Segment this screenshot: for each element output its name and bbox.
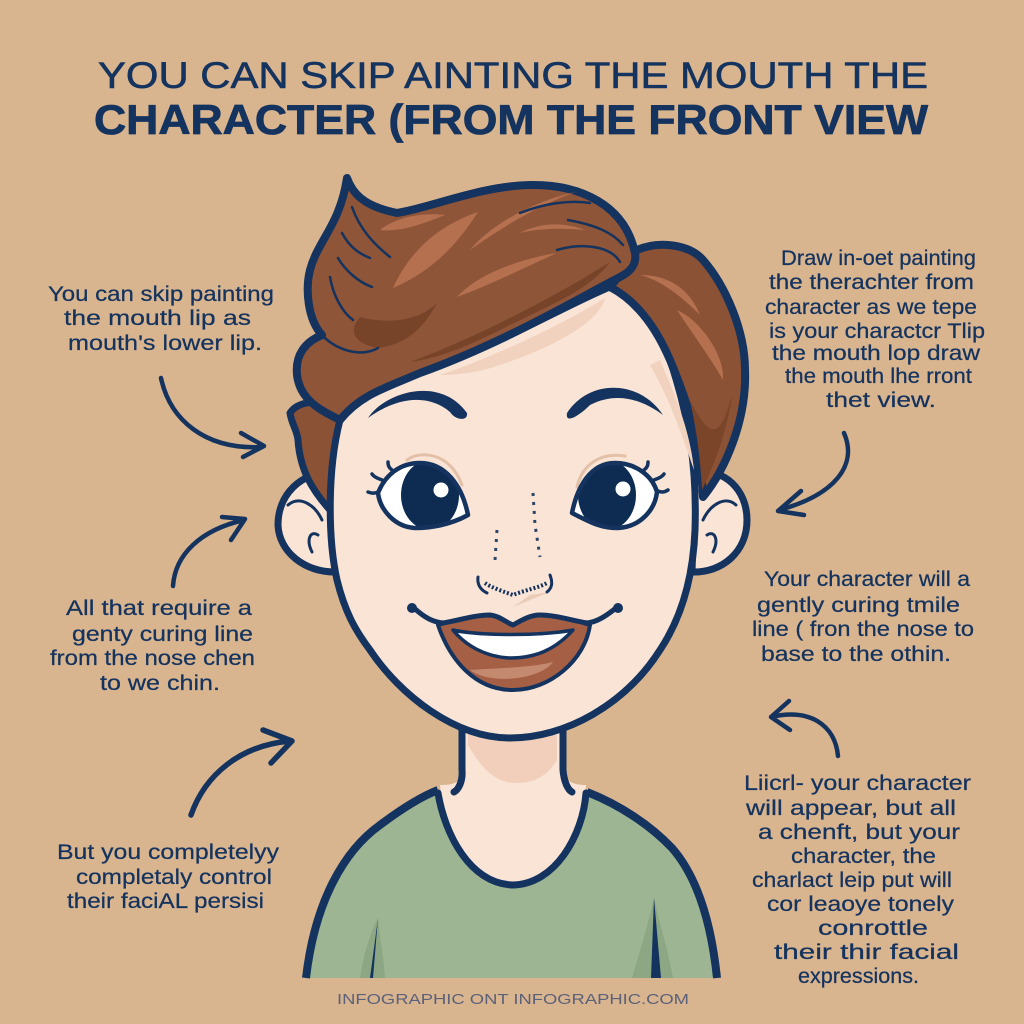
- arrow: bottom left: [191, 730, 292, 815]
- callout: middle left: from the nose chen: [50, 647, 255, 670]
- callout: bottom right: a chenft, but your: [758, 821, 960, 844]
- mouth: [407, 603, 623, 690]
- callout: middle left: [50, 597, 255, 695]
- callout: middle left: to we chin.: [100, 672, 220, 695]
- hair back left: [290, 402, 345, 510]
- arrow: top right: [778, 433, 848, 515]
- callout: top right: Draw in-oet painting: [781, 247, 976, 270]
- callout: top right: [765, 247, 985, 412]
- callout: top left: You can skip painting: [48, 283, 274, 306]
- callout: top right: the therachter from: [769, 271, 974, 294]
- callout: bottom right: [744, 772, 971, 988]
- eyebrow right: [567, 388, 663, 418]
- callout: bottom right: their thir facial: [774, 941, 959, 964]
- neck: [438, 720, 586, 885]
- face: [330, 287, 695, 738]
- eye left: [368, 455, 468, 530]
- callout: top right: is your charactcr Tlip: [769, 320, 985, 343]
- callout: top right: the mouth lhe rront: [785, 365, 972, 388]
- callout: bottom right: conrottle: [818, 917, 928, 940]
- callout: middle right: gently curing tmile: [757, 594, 960, 617]
- callout: top right: the mouth lop draw: [772, 342, 981, 365]
- callout: middle left: genty curing line: [72, 623, 253, 646]
- callout: top right: character as we tepe: [765, 296, 977, 319]
- shirt: [306, 790, 717, 978]
- character illustration: [278, 178, 747, 978]
- callout: bottom right: character, the: [791, 845, 936, 868]
- callout: bottom left: [57, 841, 280, 913]
- callout: bottom left: But you completelyy: [57, 841, 280, 864]
- hair right: [610, 245, 745, 497]
- callout: top left: [48, 283, 274, 355]
- callout: bottom right: cor leaoye tonely: [767, 893, 955, 916]
- callout: middle right: Your character will a: [764, 568, 970, 591]
- callout: middle right: line ( fron the nose to: [752, 618, 974, 641]
- callout: middle left: All that require a: [66, 597, 252, 620]
- callout: top left: the mouth lip as: [64, 307, 251, 330]
- title: YOU CAN SKIP AINTING THE MOUTH THE: [98, 55, 928, 96]
- eye right: [572, 455, 668, 530]
- callout: bottom right: will appear, but all: [745, 797, 956, 820]
- forehead shadow: [440, 298, 694, 470]
- ear left: [278, 472, 337, 572]
- title: CHARACTER (FROM THE FRONT VIEW: [94, 96, 928, 143]
- arrow: middle left: [173, 517, 245, 586]
- callout: bottom right: expressions.: [798, 965, 919, 988]
- nose: [478, 493, 552, 607]
- callout: bottom right: Liicrl- your character: [744, 772, 971, 795]
- title: [94, 55, 928, 143]
- footer credit: INFOGRAPHIC ONT INFOGRAPHIC.COM: [337, 991, 689, 1008]
- callout: middle right: [752, 568, 974, 666]
- callout: bottom right: charlact leip put will: [752, 869, 952, 892]
- callout: bottom left: their faciAL persisi: [67, 890, 264, 913]
- arrow: top left: [161, 378, 264, 457]
- hair top: [297, 178, 635, 420]
- callout: top left: mouth's lower lip.: [68, 332, 262, 355]
- ear right: [692, 472, 747, 572]
- callout: bottom left: completaly control: [76, 866, 272, 889]
- arrow: middle right: [771, 701, 838, 756]
- callout: top right: thet view.: [826, 389, 936, 412]
- eyebrow left: [368, 391, 467, 419]
- callout: middle right: base to the othin.: [761, 643, 951, 666]
